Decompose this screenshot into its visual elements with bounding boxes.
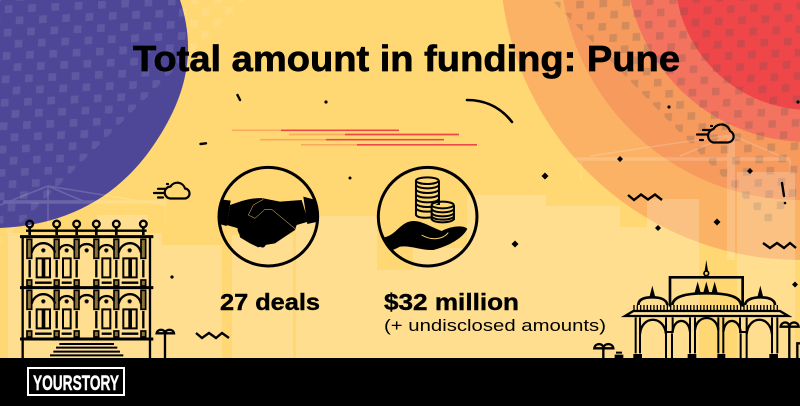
icon: coins in hand bbox=[378, 167, 477, 266]
title: Total amount in funding: Pune bbox=[133, 38, 680, 79]
crane: right bbox=[575, 135, 790, 260]
label: deals: 27 deals bbox=[220, 289, 320, 315]
label: amount: $32 million bbox=[384, 289, 519, 315]
illustration: heritage building bbox=[20, 221, 153, 358]
illustration: street lamp left bbox=[157, 330, 174, 358]
illustration: palace bbox=[594, 260, 800, 358]
crane: left bbox=[0, 186, 167, 225]
logo: YourStory bbox=[28, 368, 124, 395]
logo: YourStory: YOURSTORY bbox=[33, 372, 119, 395]
ground bar bbox=[0, 358, 800, 406]
label: undisclosed: (+ undisclosed amounts) bbox=[384, 317, 606, 335]
red speed lines bbox=[232, 130, 477, 145]
purple square pattern bbox=[0, 0, 244, 244]
background shape: purple blob bbox=[0, 0, 188, 228]
icon: cloud left bbox=[154, 183, 190, 199]
background shape: concentric orange and red circles bbox=[500, 0, 800, 260]
skyline buildings bbox=[8, 172, 795, 358]
icon: handshake bbox=[219, 167, 318, 266]
decorative marks bbox=[170, 95, 800, 338]
icon: cloud right bbox=[697, 124, 734, 142]
right square pattern bbox=[550, 0, 800, 225]
